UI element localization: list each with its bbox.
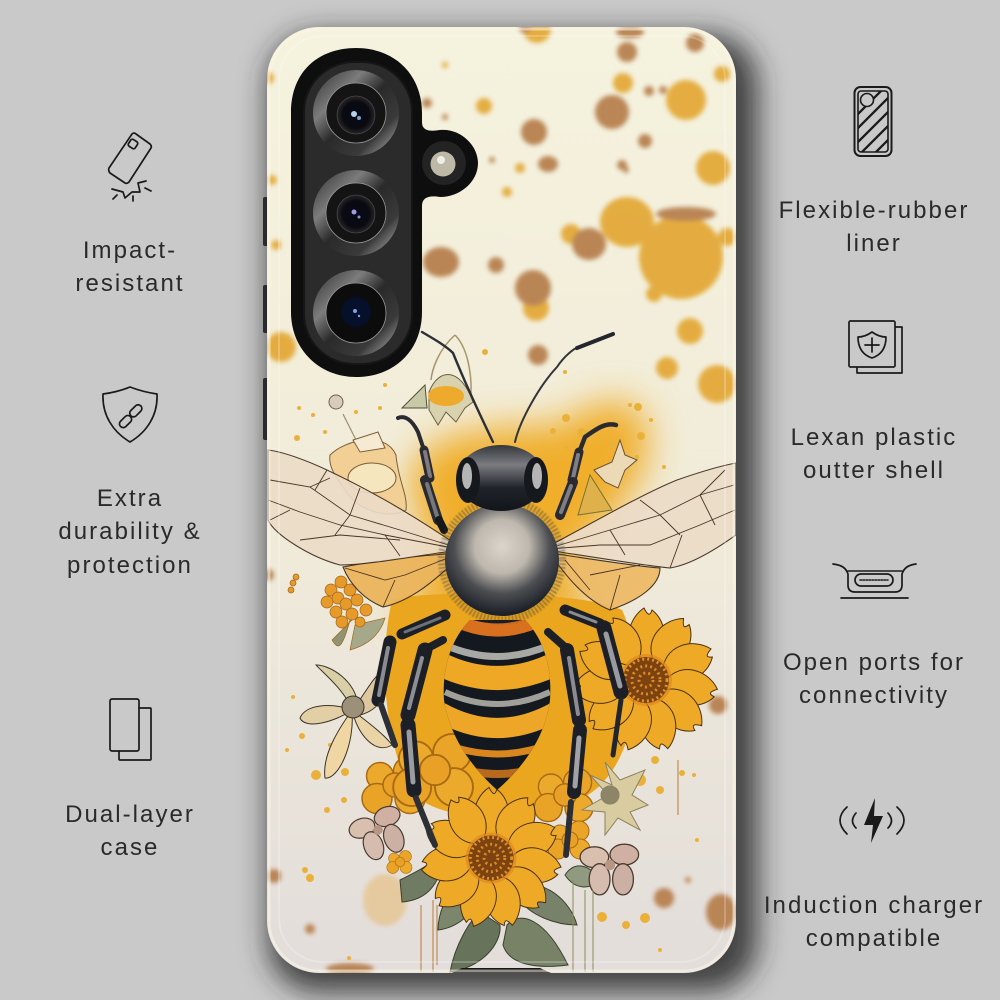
abdomen xyxy=(444,620,550,790)
label: Impact- xyxy=(83,237,177,264)
feature: impact-resistant xyxy=(75,133,185,297)
pink flowers xyxy=(345,803,639,895)
lens bottom xyxy=(313,270,399,356)
hanging flower xyxy=(402,335,473,425)
faded flower lower right xyxy=(582,762,648,835)
bottom sunflower xyxy=(419,787,563,931)
icon: shield with chain xyxy=(103,387,157,442)
lens middle xyxy=(313,170,399,256)
head xyxy=(456,445,548,511)
icon: usb-c port xyxy=(833,564,916,598)
icon: shell layers with shield xyxy=(849,321,902,373)
case artwork xyxy=(262,15,736,975)
feature: dual-layer xyxy=(65,699,195,861)
label xyxy=(783,649,965,709)
left fore wing xyxy=(268,450,460,565)
marigolds xyxy=(362,734,593,873)
phone shadow xyxy=(268,34,758,992)
wings xyxy=(268,450,736,610)
label: Flexible-rubber xyxy=(779,197,969,224)
feature: durability xyxy=(58,387,202,579)
feature: flexible liner xyxy=(780,86,967,251)
label: durability & xyxy=(58,518,202,545)
label xyxy=(65,801,195,861)
icon: dropped phone xyxy=(109,133,151,201)
antennae xyxy=(422,332,613,442)
label: Dual-layer xyxy=(65,801,195,828)
label xyxy=(75,237,185,297)
camera inner plate xyxy=(304,62,412,364)
orange flower cluster xyxy=(288,574,385,650)
leaves xyxy=(400,865,591,973)
bottom edge port cutout xyxy=(452,968,551,973)
label: connectivity xyxy=(799,682,949,709)
yellow watercolour wash xyxy=(400,401,649,620)
phone case xyxy=(262,15,736,975)
cream daisy left xyxy=(300,665,392,778)
label: compatible xyxy=(806,925,942,952)
right fore wing xyxy=(547,463,736,568)
camera island xyxy=(291,48,478,377)
label: Induction charger xyxy=(764,892,984,919)
thorax xyxy=(442,500,562,620)
feature: open ports xyxy=(783,564,965,709)
label xyxy=(58,485,202,579)
icon: striped liner xyxy=(854,86,892,157)
feature: lexan shell xyxy=(791,321,957,484)
label: outter shell xyxy=(803,457,945,484)
mid and hind legs xyxy=(378,610,621,855)
label: resistant xyxy=(75,270,185,297)
label xyxy=(764,892,984,952)
label: case xyxy=(101,834,159,861)
right hind wing xyxy=(550,553,660,610)
icon: wireless charging bolt xyxy=(840,798,904,843)
icon: two layers xyxy=(110,699,151,760)
right sunflower xyxy=(572,608,720,754)
small flower top right xyxy=(578,440,637,515)
feature: induction xyxy=(764,798,984,952)
left hind wing xyxy=(342,554,446,608)
drips xyxy=(421,760,678,972)
label: Lexan plastic xyxy=(791,424,957,451)
label xyxy=(779,197,969,257)
cream flower top left xyxy=(329,395,406,514)
wing veins xyxy=(268,470,735,610)
paint splatter spots xyxy=(262,15,736,975)
front legs xyxy=(398,417,616,530)
case inner rim highlight xyxy=(279,36,725,962)
lens top xyxy=(313,70,399,156)
label: Extra xyxy=(97,485,163,512)
orange wash bottom left xyxy=(363,874,407,926)
label: liner xyxy=(846,230,902,257)
label: Open ports for xyxy=(783,649,965,676)
flash xyxy=(422,141,466,185)
label xyxy=(791,424,957,484)
side buttons xyxy=(263,197,269,440)
speckles xyxy=(285,349,702,960)
label: protection xyxy=(67,552,193,579)
body wash xyxy=(385,593,636,817)
